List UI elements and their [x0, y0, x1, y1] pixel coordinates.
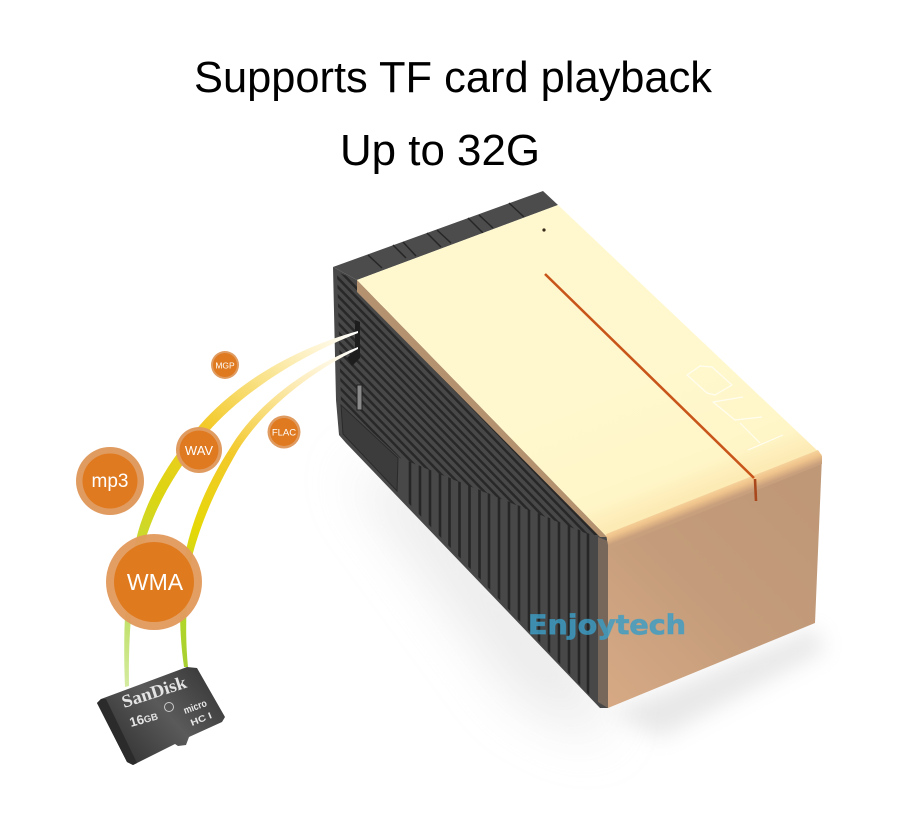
microSD card: HC I: [189, 710, 213, 728]
small switch: [357, 385, 362, 410]
badge: WAV: [176, 427, 222, 473]
tan side band: [357, 280, 607, 537]
microSD card: 16GB: [128, 708, 160, 730]
microSD card: micro: [182, 698, 209, 717]
orange groove: [545, 274, 754, 478]
badge: MGP: MGP: [215, 360, 235, 370]
microSD card: SanDisk: [119, 672, 189, 712]
badge: mp3: mp3: [92, 471, 128, 492]
soft shadow under speaker: [350, 470, 825, 740]
title line 1: Supports TF card playback: [194, 53, 713, 102]
badge: FLAC: [268, 416, 300, 448]
cream top face: [357, 205, 822, 537]
badge: WMA: WMA: [127, 569, 184, 595]
wire 2: [180, 347, 358, 667]
recessed panel: [341, 405, 398, 491]
wire 1: [124, 331, 358, 687]
title line 2: Up to 32G: [340, 126, 540, 175]
badge: WMA: [106, 534, 202, 630]
card slot port: [347, 320, 360, 366]
black side face: [333, 267, 608, 708]
watermark: Enjoytech: [528, 610, 686, 641]
dark left sliver: [598, 537, 608, 708]
speaker body: [333, 191, 822, 720]
badge: MGP: [211, 351, 239, 379]
diagonal ribs: [337, 274, 598, 535]
badge: FLAC: FLAC: [272, 428, 296, 438]
strip notches: [368, 203, 524, 268]
copper front face: [608, 456, 822, 708]
vertical ribs: [408, 462, 590, 695]
black top strip: [333, 191, 558, 280]
indicator dot: [542, 228, 546, 232]
badge: WAV: WAV: [185, 443, 213, 458]
badge: mp3: [76, 447, 144, 515]
engraved logo: [687, 366, 783, 450]
microSD card: [97, 667, 225, 765]
front bevel: [606, 450, 822, 548]
